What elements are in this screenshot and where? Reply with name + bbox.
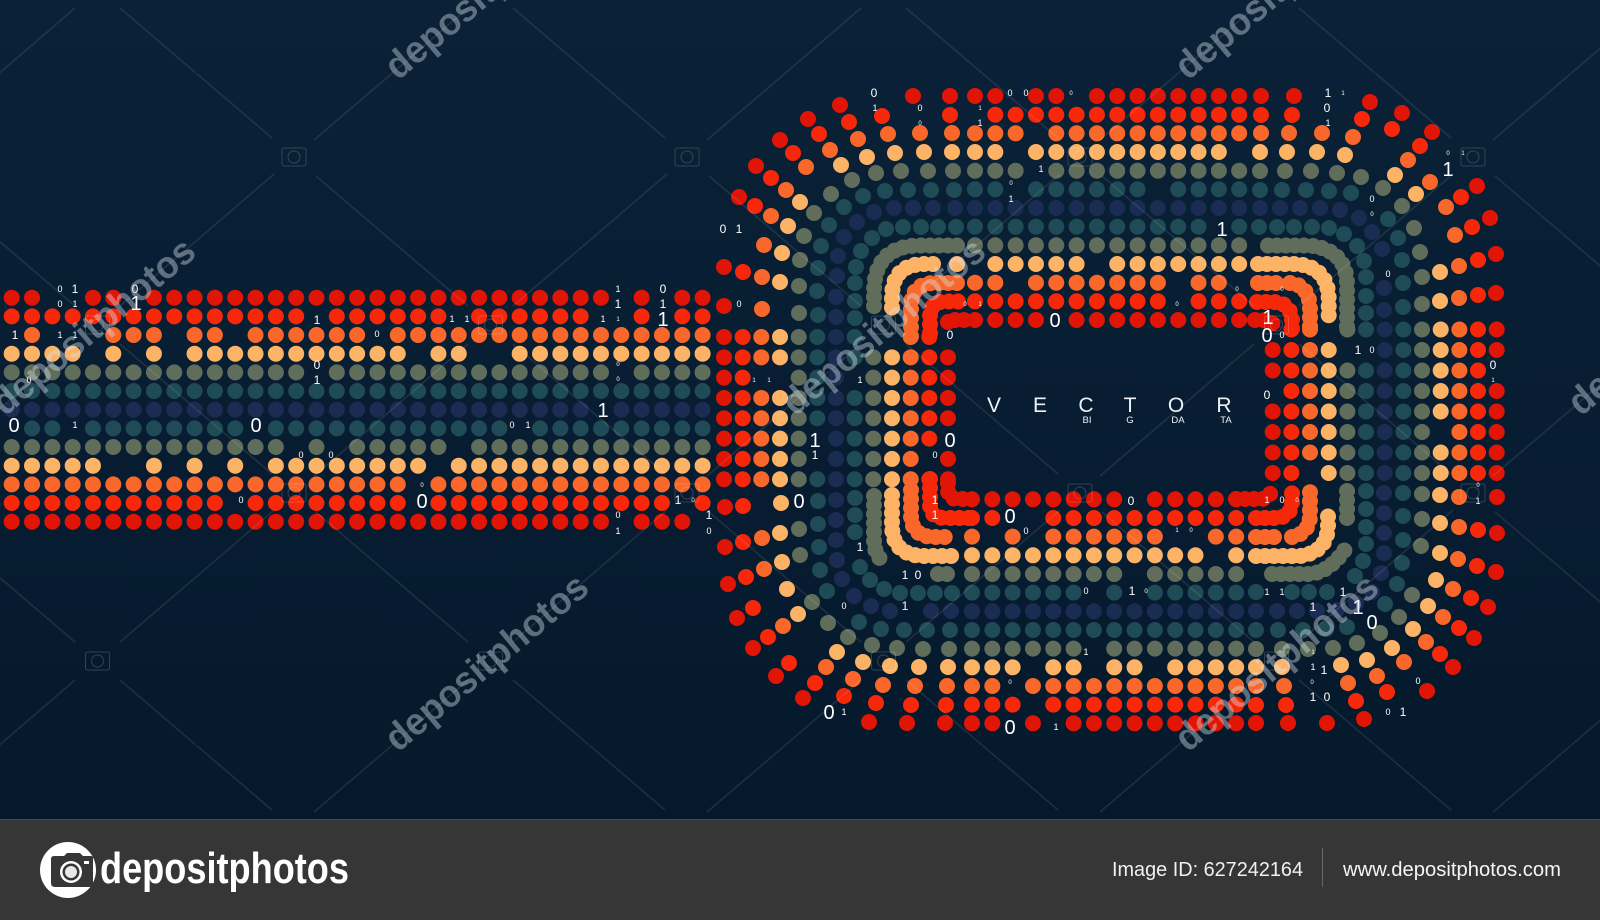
words: BIG DATA: G bbox=[1126, 415, 1134, 426]
repeated diagonal watermark text: depositphotos bbox=[377, 566, 597, 760]
logo wordmark: depositphotos bbox=[100, 844, 349, 893]
repeated diagonal watermark text: depositphotos bbox=[774, 230, 994, 424]
site url: www.depositphotos.com bbox=[1342, 859, 1561, 881]
scattered binary digits: 10000100001101000001000001111 bbox=[420, 91, 1495, 686]
inner merged corner arcs bbox=[874, 246, 1347, 574]
scattered binary digits: 0011100100011110101010100110100000010011011110011 bbox=[26, 88, 1481, 732]
footer bar bbox=[0, 819, 1600, 920]
dotted data stream and rounded dotted frame bbox=[12, 96, 1497, 723]
central title bbox=[987, 394, 1232, 426]
words: BIG DATA: TA bbox=[1220, 415, 1232, 426]
scattered binary digits: 1001100111000000101 bbox=[8, 159, 1454, 739]
divider bbox=[1322, 848, 1323, 887]
repeated diagonal watermark text: depositphotos bbox=[1167, 566, 1387, 760]
right side columns bbox=[1273, 330, 1497, 474]
word: VECTOR: VECTOR bbox=[987, 394, 1232, 417]
image id: Image ID: 627242164 bbox=[1112, 859, 1303, 881]
icon: camera logo bbox=[40, 842, 96, 898]
words: BIG DATA: BI bbox=[1083, 415, 1091, 426]
scattered binary digits: 10110101111001010111001011111110101 bbox=[12, 86, 1497, 719]
straight dot rows and columns with gaps masked out bbox=[12, 96, 1497, 723]
horizontal band rows, frame rows and left side columns bbox=[12, 96, 1240, 723]
words: BIG DATA: DA bbox=[1171, 415, 1185, 426]
fanned corner dots bbox=[724, 96, 1497, 723]
